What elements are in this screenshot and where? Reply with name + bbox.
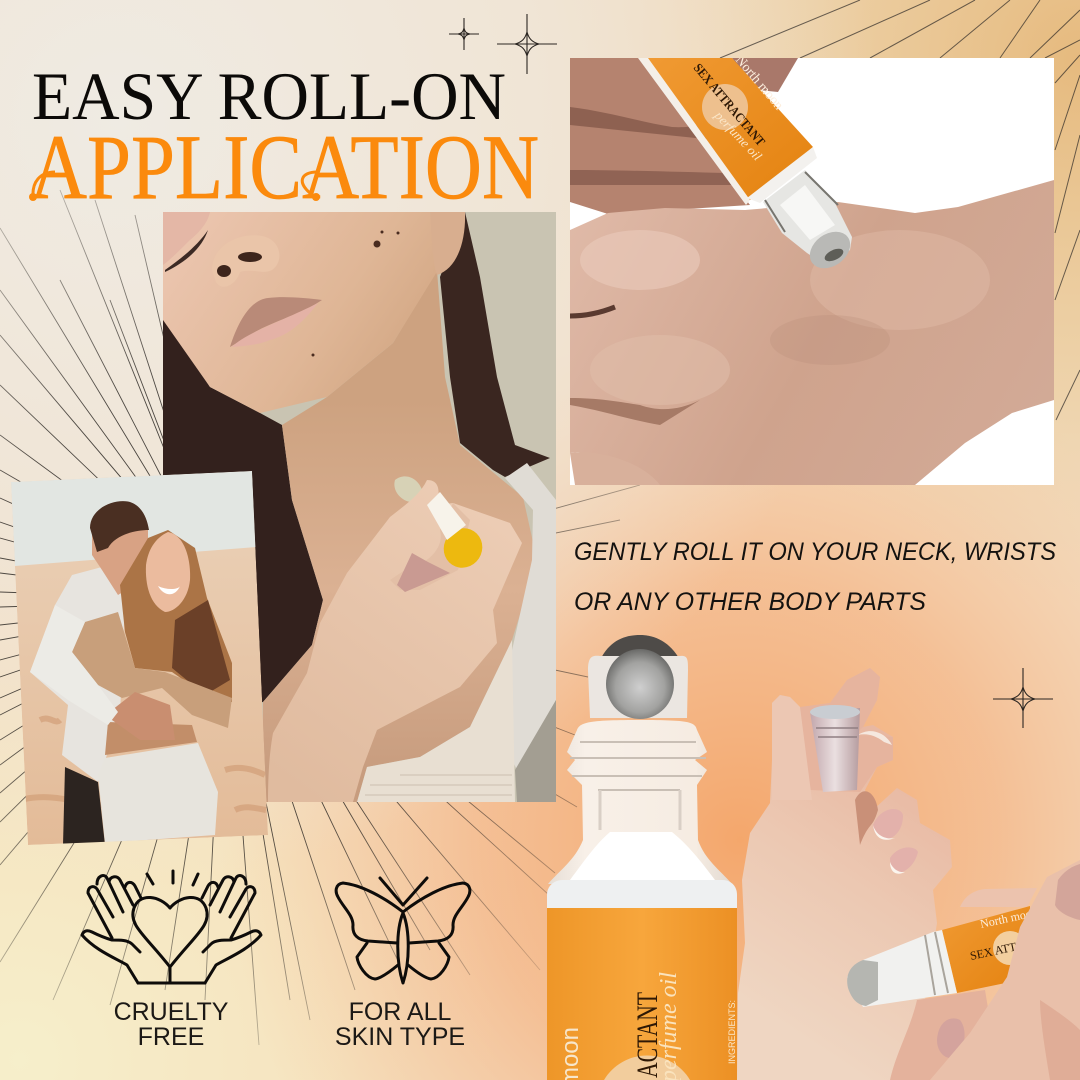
thumb	[930, 860, 1080, 1080]
knit top	[357, 640, 515, 802]
left hair	[163, 315, 323, 720]
photo: hand and wrist: SEX ATTRACTANT	[691, 60, 769, 149]
upper fingers	[570, 58, 750, 214]
neck and chest	[262, 270, 537, 802]
instruction text: OR ANY OTHER BODY PARTS	[574, 588, 926, 616]
label: for all skin type: SKIN TYPE	[335, 1023, 465, 1051]
instruction text	[574, 538, 1056, 616]
small roll-on bottle and fingers	[847, 860, 1080, 1080]
photo: hand and wrist	[570, 53, 1054, 485]
hand back and wrist	[570, 180, 1054, 485]
glass roller	[763, 170, 852, 255]
beige top	[72, 612, 232, 728]
silver cap	[810, 708, 860, 792]
product: roll-on bottle: INGREDIENTS:	[727, 1000, 737, 1064]
photo: hand and wrist: perfume oil	[711, 107, 765, 164]
eye	[163, 212, 210, 265]
title: easy roll-on: EASY ROLL-ON	[32, 58, 506, 134]
shirt	[505, 463, 556, 770]
label: cruelty free: FREE	[138, 1023, 204, 1051]
photo: woman applying roll-on to neck	[163, 212, 556, 802]
woman	[120, 530, 232, 702]
photo: laughing couple on beach	[11, 471, 268, 845]
nails	[873, 809, 903, 840]
right hair	[440, 212, 550, 477]
nose	[266, 253, 279, 272]
roll-on	[394, 476, 422, 502]
small roll-on bottle and fingers: North moon	[979, 905, 1039, 931]
product: roll-on bottle: perfume oil	[656, 972, 682, 1080]
sparkle right	[993, 668, 1053, 728]
sparkles top	[449, 14, 557, 74]
product: roll-on bottle	[547, 635, 737, 1080]
icon: hands holding heart	[82, 871, 261, 983]
roller collar	[588, 656, 688, 718]
icon: butterfly	[336, 878, 470, 983]
orange label	[547, 908, 737, 1080]
man	[30, 567, 125, 782]
ball	[600, 635, 680, 660]
lips	[230, 297, 322, 347]
lower fingers	[890, 990, 1000, 1080]
orange tube	[638, 58, 750, 205]
product: roll-on bottle: ACTANT	[631, 992, 664, 1078]
hand holding silver cap	[737, 668, 952, 1080]
title: application: APPLICATION	[30, 116, 539, 218]
white shoulder band	[547, 880, 737, 908]
ear	[430, 212, 465, 275]
moles	[312, 230, 400, 356]
neck and threads	[548, 720, 732, 884]
face	[163, 212, 438, 413]
photo: hand and wrist: North moon	[732, 53, 786, 113]
label: cruelty free: CRUELTY	[114, 998, 229, 1026]
instruction text: GENTLY ROLL IT ON YOUR NECK, WRISTS	[574, 538, 1056, 566]
glass	[847, 930, 957, 1007]
label: for all skin type: FOR ALL	[349, 998, 452, 1026]
hand	[268, 480, 522, 802]
small roll-on bottle and fingers: SEX ATTR	[969, 938, 1025, 963]
orange tube	[942, 906, 1030, 993]
